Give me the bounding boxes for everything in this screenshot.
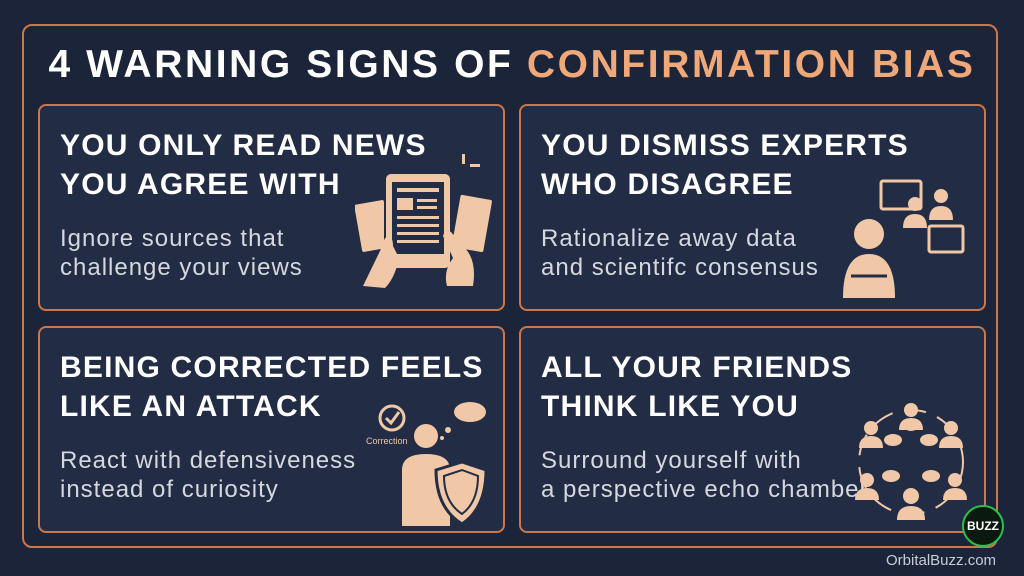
text block: instead of curiosity [60, 476, 279, 503]
heading: THINK LIKE YOU [541, 390, 799, 423]
panel: friends think like you [519, 326, 986, 533]
text block: Surround yourself with [541, 447, 802, 474]
heading [60, 129, 427, 201]
text block: Ignore sources that [60, 225, 284, 252]
icon: person arms crossed with certificates [843, 180, 964, 298]
text block [60, 225, 303, 281]
panel: corrected feels like attack [38, 326, 505, 533]
text block: Rationalize away data [541, 225, 797, 252]
logo badge [962, 505, 1004, 547]
icon: circle of people [855, 403, 967, 520]
icon: tablet with hands [355, 154, 492, 288]
text block [541, 225, 819, 281]
text block: React with defensiveness [60, 447, 356, 474]
heading: ALL YOUR FRIENDS [541, 351, 852, 384]
icon: person with shield: Correction [366, 436, 408, 446]
text block [541, 447, 868, 503]
heading: LIKE AN ATTACK [60, 390, 322, 423]
footer url: OrbitalBuzz.com [886, 552, 996, 569]
heading [541, 351, 852, 423]
text block [60, 447, 356, 503]
text block: and scientifc consensus [541, 254, 819, 281]
heading: YOU ONLY READ NEWS [60, 129, 427, 162]
heading: YOU AGREE WITH [60, 168, 341, 201]
heading: WHO DISAGREE [541, 168, 794, 201]
title: 4 WARNING SIGNS OF CONFIRMATION BIAS [48, 43, 976, 86]
text block: challenge your views [60, 254, 303, 281]
panel: dismiss experts [519, 104, 986, 311]
icon: person with shield [366, 402, 486, 526]
heading [541, 129, 909, 201]
heading: BEING CORRECTED FEELS [60, 351, 484, 384]
text block: a perspective echo chamber [541, 476, 868, 503]
heading [60, 351, 484, 423]
logo badge: BUZZ [967, 519, 999, 533]
heading: YOU DISMISS EXPERTS [541, 129, 909, 162]
panel: read news you agree with [38, 104, 505, 311]
